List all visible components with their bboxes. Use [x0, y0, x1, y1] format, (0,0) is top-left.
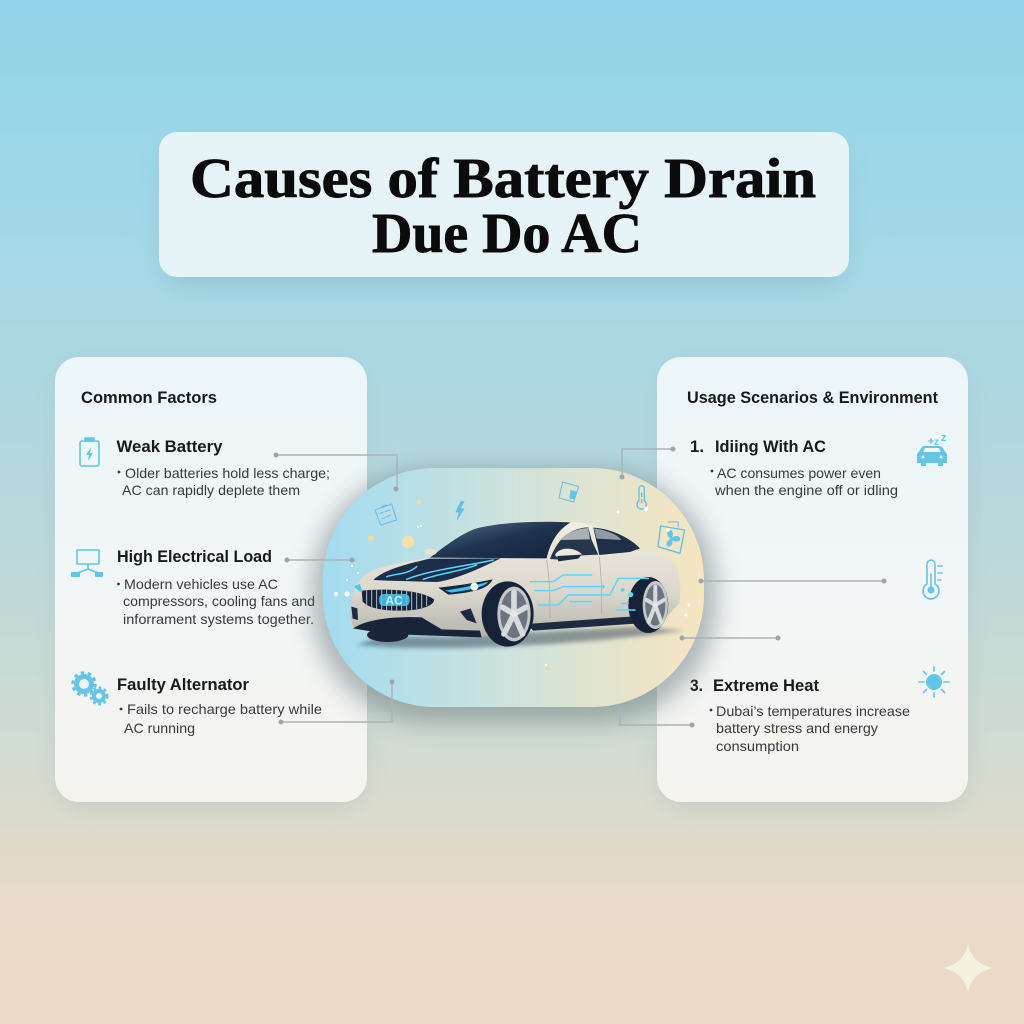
- item: idling with AC: 1.: [690, 437, 704, 456]
- item: extreme heat: consumption: [716, 738, 799, 754]
- door seams: [547, 557, 602, 618]
- AC glow badge: [379, 593, 410, 607]
- item: extreme heat: battery stress and energy: [716, 720, 878, 736]
- title banner: Due Do AC: [372, 203, 642, 265]
- front wheel: [482, 581, 534, 647]
- item: idling with AC: when the engine off or idling: [714, 482, 898, 498]
- item: faulty alternator: Faulty Alternator: [117, 675, 249, 694]
- windshield: [430, 522, 571, 558]
- icon: sun: [919, 667, 949, 697]
- item: extreme heat: Extreme Heat: [713, 676, 819, 695]
- item: idling with AC: [690, 432, 947, 498]
- item: weak battery: Weak Battery: [116, 437, 223, 456]
- item: extreme heat: Dubai’s temperatures increase: [716, 703, 910, 719]
- hood: [373, 558, 501, 582]
- side windows: [550, 527, 598, 560]
- AC glow badge: AC: [385, 593, 403, 607]
- item: idling with AC: AC consumes power even: [717, 465, 881, 481]
- item: weak battery: Older batteries hold less charge;: [125, 465, 330, 481]
- panel: usage scenarios and environment: [657, 357, 968, 806]
- item: high electrical load: [71, 547, 315, 627]
- item: extreme heat: [690, 667, 949, 754]
- icon: sleeping car: z: [934, 437, 939, 448]
- grille: [362, 590, 434, 611]
- item: extreme heat: 3.: [690, 676, 703, 695]
- car body: [350, 521, 680, 637]
- floating icons and sparkles: [334, 482, 690, 670]
- icon: checklist: [375, 504, 397, 525]
- ground shadow: [357, 627, 683, 648]
- connector lines: [274, 446, 886, 728]
- item: weak battery: [80, 437, 330, 498]
- car: [350, 521, 683, 648]
- item: faulty alternator: [73, 673, 322, 736]
- icon: battery: [80, 438, 99, 466]
- panel: common factors: [55, 357, 367, 806]
- rear wheel: [628, 577, 668, 633]
- title banner: Causes of Battery Drain: [190, 148, 816, 210]
- item: faulty alternator: Fails to recharge battery while: [127, 701, 322, 717]
- icon: thermometer: [923, 560, 942, 599]
- item: high electrical load: compressors, cooling fans and: [123, 593, 315, 609]
- front lower bumper: [353, 617, 482, 637]
- fog vents: [351, 607, 477, 623]
- headlights: [438, 579, 493, 595]
- side sill: [527, 617, 640, 631]
- icon: gears: [73, 673, 107, 704]
- front left tyre: [367, 628, 408, 642]
- item: high electrical load: inforrament systems together.: [123, 611, 314, 627]
- icon: network: [71, 550, 103, 577]
- icon: sleeping car: [917, 432, 947, 466]
- sparkle star: [943, 944, 993, 992]
- title banner: [159, 132, 849, 284]
- item: high electrical load: Modern vehicles use AC: [124, 576, 278, 592]
- circuit lines: [387, 560, 648, 610]
- icon: fan box: [658, 522, 685, 553]
- item: faulty alternator: AC running: [124, 720, 195, 736]
- icon: sleeping car: z: [941, 432, 947, 444]
- central car illustration: [312, 468, 716, 722]
- item: idling with AC: Idiing With AC: [715, 437, 826, 456]
- icon: bolt: [455, 501, 465, 521]
- heading: usage scenarios: Usage Scenarios & Environment: [687, 389, 938, 407]
- icon: small thermometer: [637, 486, 646, 509]
- item: weak battery: AC can rapidly deplete them: [122, 482, 300, 498]
- heading: common factors: Common Factors: [81, 389, 217, 407]
- side mirror: [555, 549, 582, 560]
- icon: panel chart: [559, 482, 579, 502]
- item: high electrical load: High Electrical Load: [117, 547, 272, 566]
